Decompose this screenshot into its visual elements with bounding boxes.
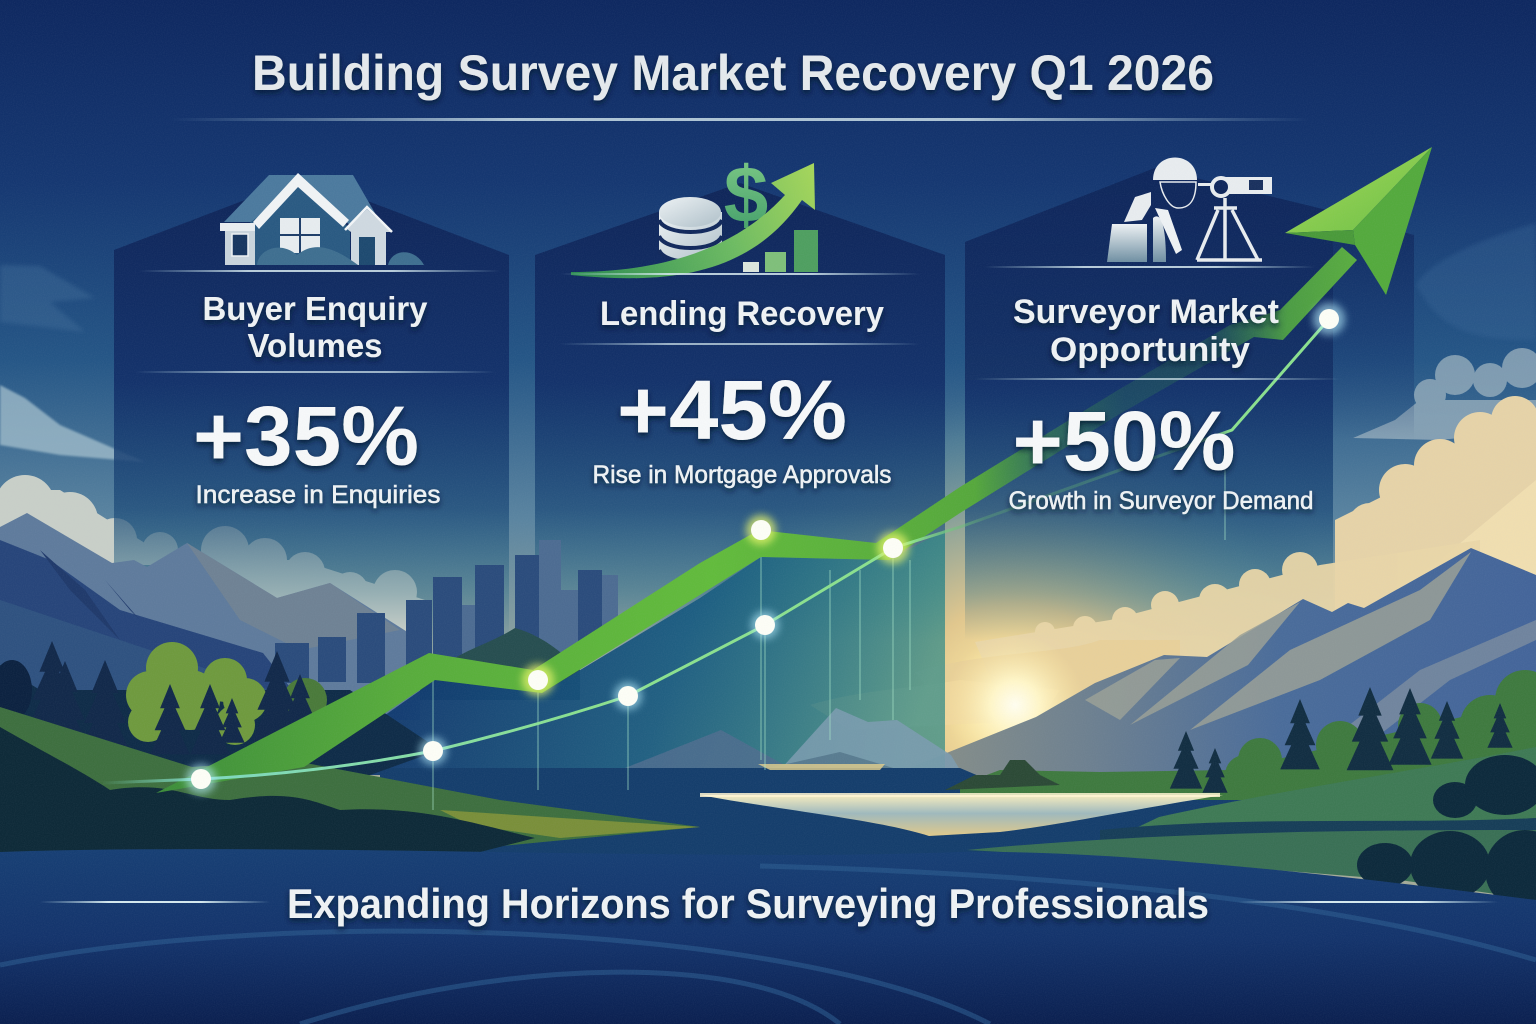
caption: Rise in Mortgage Approvals: [592, 461, 892, 489]
icon: surveyor with theodolite: [1107, 158, 1272, 262]
panel: buyer enquiry volumes background: [114, 177, 509, 640]
right mountains: [887, 548, 1536, 790]
lower warm clouds: [810, 540, 1480, 730]
chart: large green growth arrow: [156, 147, 1432, 793]
chart: thin trend line: [103, 319, 1329, 783]
right forest: [945, 670, 1536, 800]
footer left rule: [40, 901, 270, 903]
arrowhead: [1285, 147, 1432, 295]
heading: Lending Recovery: [600, 295, 884, 333]
card: surveyor market opportunity: [975, 158, 1340, 515]
panel: surveyor market upper block: [965, 168, 1333, 380]
footer right rule: [1238, 901, 1498, 903]
card rule: [560, 273, 920, 275]
small distant mountains: [620, 708, 960, 770]
title divider: [170, 118, 1310, 121]
stat: +45%: [617, 363, 847, 457]
card rule: [560, 343, 920, 345]
footer tagline: Expanding Horizons for Surveying Professionals: [287, 880, 1209, 927]
chart: data points: [186, 303, 1345, 794]
caption: Growth in Surveyor Demand: [1008, 487, 1314, 515]
panel: surveyor market background: [965, 380, 1333, 640]
left forest: [0, 641, 440, 800]
title: Building Survey Market Recovery Q1 2026: [252, 45, 1214, 101]
panel: lending recovery background: [535, 183, 945, 640]
heading: Volumes: [248, 327, 382, 364]
card: lending recovery: [560, 150, 920, 489]
card rule: [135, 371, 495, 373]
lake and valley: [700, 747, 1536, 910]
stat: +50%: [1012, 394, 1236, 488]
road and lower band: [0, 849, 1536, 1024]
panel: surveyor market wide background: [965, 168, 1414, 440]
heading: Opportunity: [1050, 331, 1250, 369]
upper clouds: [0, 223, 1536, 650]
city skyline: [275, 540, 618, 700]
left mountains: [0, 513, 420, 720]
card rule: [140, 270, 500, 272]
card rule: [985, 266, 1315, 268]
caption: Increase in Enquiries: [196, 481, 440, 509]
icon: coins, dollar and growth arrow: [571, 150, 818, 278]
left hills: [0, 707, 700, 852]
chart: vertical data drop lines: [433, 440, 1225, 810]
stat: +35%: [193, 389, 419, 483]
chart: shaded area under growth line: [300, 530, 945, 775]
heading: Surveyor Market: [1013, 293, 1279, 331]
sun: [945, 635, 1085, 775]
icon: coins, dollar and growth arrow: $: [724, 150, 768, 239]
icon: house: [220, 173, 424, 265]
card: buyer enquiry volumes: [135, 173, 500, 509]
valley floor: [380, 768, 1536, 870]
road curves: [0, 866, 1536, 1024]
card rule: [975, 378, 1340, 380]
heading: Buyer Enquiry: [202, 290, 428, 327]
